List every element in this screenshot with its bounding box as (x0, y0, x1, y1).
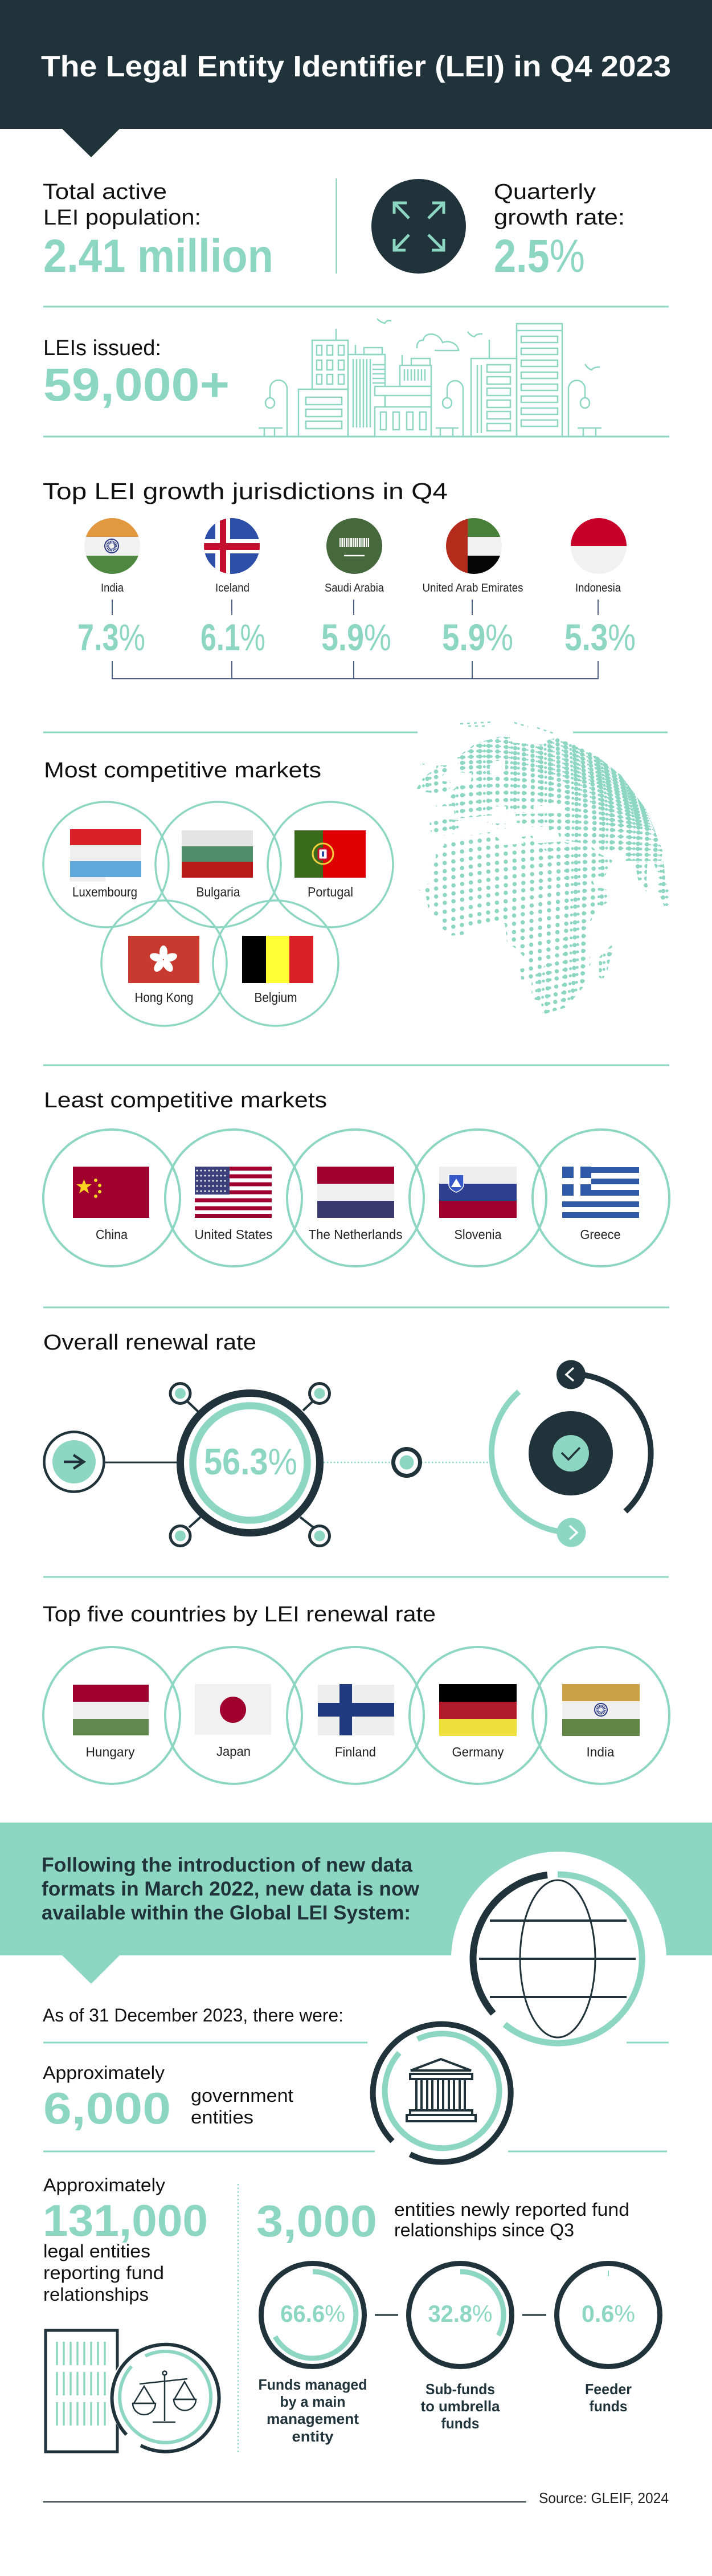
donut labels: Sub-funds (425, 2381, 495, 2398)
growth percentages: 5.9% (321, 616, 391, 658)
icon: renewal cycle with check mark (492, 1360, 651, 1547)
icon: expanding arrows circle (371, 179, 466, 274)
panel: newly reported fund relationships: 3,000 (256, 2196, 377, 2246)
country labels: Portugal (308, 885, 353, 899)
title: The Legal Entity Identifier (LEI) in Q4 2023 (41, 50, 671, 83)
panel: least competitive markets (43, 1089, 669, 1266)
callout text: available within the Global LEI System: (42, 1902, 411, 1924)
panel: most competitive markets (43, 759, 393, 1026)
panel: legal entities reporting fund relationships: relationships (43, 2284, 149, 2305)
country labels: India (587, 1744, 615, 1759)
illustration: dotted globe (417, 722, 669, 1014)
country labels: The Netherlands (309, 1227, 402, 1242)
country labels (85, 1744, 615, 1759)
growth percentages: 5.9% (442, 616, 513, 658)
donut labels: by a main (280, 2393, 345, 2410)
panel: government entities: government (191, 2085, 293, 2106)
panel: legal entities reporting fund relationships (43, 2175, 208, 2305)
panel: legal entities reporting fund relationships: reporting fund (43, 2263, 164, 2283)
icon: Iceland round flag (204, 518, 260, 574)
donut labels: entity (292, 2428, 334, 2445)
country labels: Finland (335, 1744, 376, 1759)
panel: government entities: Approximately (43, 2063, 165, 2083)
country labels: Greece (580, 1227, 621, 1242)
overlapping circles (43, 1130, 669, 1266)
panel: legal entities reporting fund relationships: legal entities (43, 2241, 150, 2261)
country labels: Hong Kong (134, 990, 194, 1005)
panel: quarterly growth rate: 2.5% (494, 230, 585, 282)
flag: Belgium (242, 936, 313, 983)
panel: legal entities reporting fund relationships: Approximately (43, 2175, 165, 2195)
flag: Japan (195, 1684, 271, 1735)
donut labels: funds (441, 2415, 480, 2432)
donut labels: Funds managed (259, 2376, 367, 2393)
panel: government entities: entities (191, 2107, 253, 2127)
donut labels: Feeder (585, 2381, 632, 2398)
panel: quarterly growth rate: growth rate: (494, 206, 625, 230)
icon: arrow in circle (44, 1432, 104, 1492)
overlapping circles (43, 802, 393, 1026)
heading: top LEI growth jurisdictions: Top LEI growth jurisdictions in Q4 (43, 478, 448, 504)
flag: Hong Kong (128, 936, 199, 983)
flag: Hungary (73, 1685, 149, 1735)
country labels: China (96, 1227, 128, 1242)
donut labels: funds (589, 2398, 628, 2415)
flag: Luxembourg (70, 829, 141, 882)
flag: Portugal (294, 830, 366, 878)
flag: Greece (562, 1167, 639, 1218)
growth jurisdiction labels: India (101, 582, 124, 594)
panel: newly reported fund relationships: relationships since Q3 (394, 2220, 574, 2240)
flag: Germany (439, 1684, 517, 1736)
flag: The Netherlands (317, 1167, 394, 1218)
panel: total active LEI population: Total active (43, 180, 167, 204)
panel: LEIs issued (43, 336, 230, 411)
heading: Most competitive markets (44, 759, 321, 782)
panel: top five countries by renewal rate (43, 1603, 669, 1784)
panel: government entities (43, 2063, 293, 2133)
panel: LEIs issued: LEIs issued: (43, 336, 161, 360)
dotted connector with node (324, 1449, 489, 1476)
donut chart: feeder funds (557, 2264, 660, 2366)
growth jurisdiction labels: Iceland (215, 582, 249, 594)
country labels: Germany (452, 1744, 504, 1759)
donut chart: funds managed by a main management entity: 66.6% (280, 2300, 345, 2327)
donut labels: management (267, 2410, 359, 2427)
panel: total active LEI population: 2.41 million (43, 230, 273, 282)
panel: quarterly growth rate: Quarterly (494, 180, 596, 204)
header banner (0, 0, 712, 157)
country labels: Japan (216, 1744, 251, 1759)
panel: total active LEI population (43, 180, 273, 282)
flag: Bulgaria (182, 830, 253, 878)
overlapping circles (43, 1647, 669, 1784)
flag: India (562, 1684, 640, 1736)
panel: legal entities reporting fund relationships: 131,000 (43, 2195, 208, 2245)
illustration: city skyline (43, 319, 669, 437)
icon: Indonesia round flag (571, 518, 627, 574)
flag: Finland (318, 1684, 394, 1735)
growth jurisdiction labels: United Arab Emirates (423, 582, 523, 594)
connector ticks and bracket (112, 600, 598, 679)
callout text (42, 1854, 420, 1924)
country labels: Hungary (85, 1744, 135, 1759)
donut chart: funds managed by a main management entity (261, 2264, 365, 2366)
country labels: United States (195, 1227, 272, 1242)
growth jurisdiction labels (101, 582, 621, 594)
flag: Slovenia (439, 1167, 517, 1218)
heading: Top five countries by LEI renewal rate (43, 1603, 436, 1627)
donut chart: sub-funds to umbrella funds (409, 2264, 512, 2366)
panel: total active LEI population: LEI population: (43, 206, 201, 230)
icon: government building in rings (373, 2024, 511, 2162)
donut labels (259, 2376, 632, 2445)
panel: newly reported fund relationships: entities newly reported fund (394, 2199, 629, 2220)
country labels (72, 885, 353, 1005)
text: as of date: As of 31 December 2023, there were: (43, 2005, 343, 2025)
flag: United States (195, 1167, 272, 1218)
growth percentages: 7.3% (77, 616, 145, 658)
growth percentages: 5.3% (564, 616, 636, 658)
donut chart: sub-funds to umbrella funds: 32.8% (428, 2300, 492, 2327)
renewal rate value: 56.3% (204, 1441, 297, 1482)
callout text: Following the introduction of new data (42, 1854, 413, 1876)
panel: government entities: 6,000 (43, 2083, 171, 2133)
donut chart: feeder funds: 0.6% (582, 2300, 635, 2327)
country labels: Bulgaria (196, 885, 240, 899)
panel: LEIs issued: 59,000+ (43, 359, 230, 411)
icon: United Arab Emirates round flag (446, 518, 502, 574)
icon: wireframe globe (473, 1874, 642, 2043)
icon: India round flag (84, 518, 140, 574)
country labels (96, 1227, 621, 1242)
diagram: overall renewal rate hub (44, 1384, 329, 1546)
country labels: Luxembourg (72, 885, 137, 899)
icon: document with scales of justice (46, 2330, 219, 2452)
growth percentages: 6.1% (200, 616, 265, 658)
growth percentages (77, 616, 636, 658)
source line: Source: GLEIF, 2024 (539, 2489, 669, 2506)
flag: China (73, 1167, 149, 1218)
heading: overall renewal rate: Overall renewal rate (43, 1331, 256, 1355)
satellite nodes (170, 1384, 329, 1546)
callout text: formats in March 2022, new data is now (42, 1878, 420, 1900)
panel: new data band (0, 1823, 712, 2069)
panel: newly reported fund relationships (256, 2196, 629, 2246)
growth jurisdiction labels: Indonesia (575, 582, 621, 594)
heading: Least competitive markets (44, 1089, 327, 1112)
panel: quarterly growth rate (494, 180, 625, 282)
growth jurisdiction labels: Saudi Arabia (325, 582, 384, 594)
donut labels: to umbrella (420, 2398, 500, 2415)
country labels: Slovenia (455, 1227, 502, 1242)
country labels: Belgium (254, 990, 297, 1005)
icon: Saudi Arabia round flag (326, 518, 382, 574)
